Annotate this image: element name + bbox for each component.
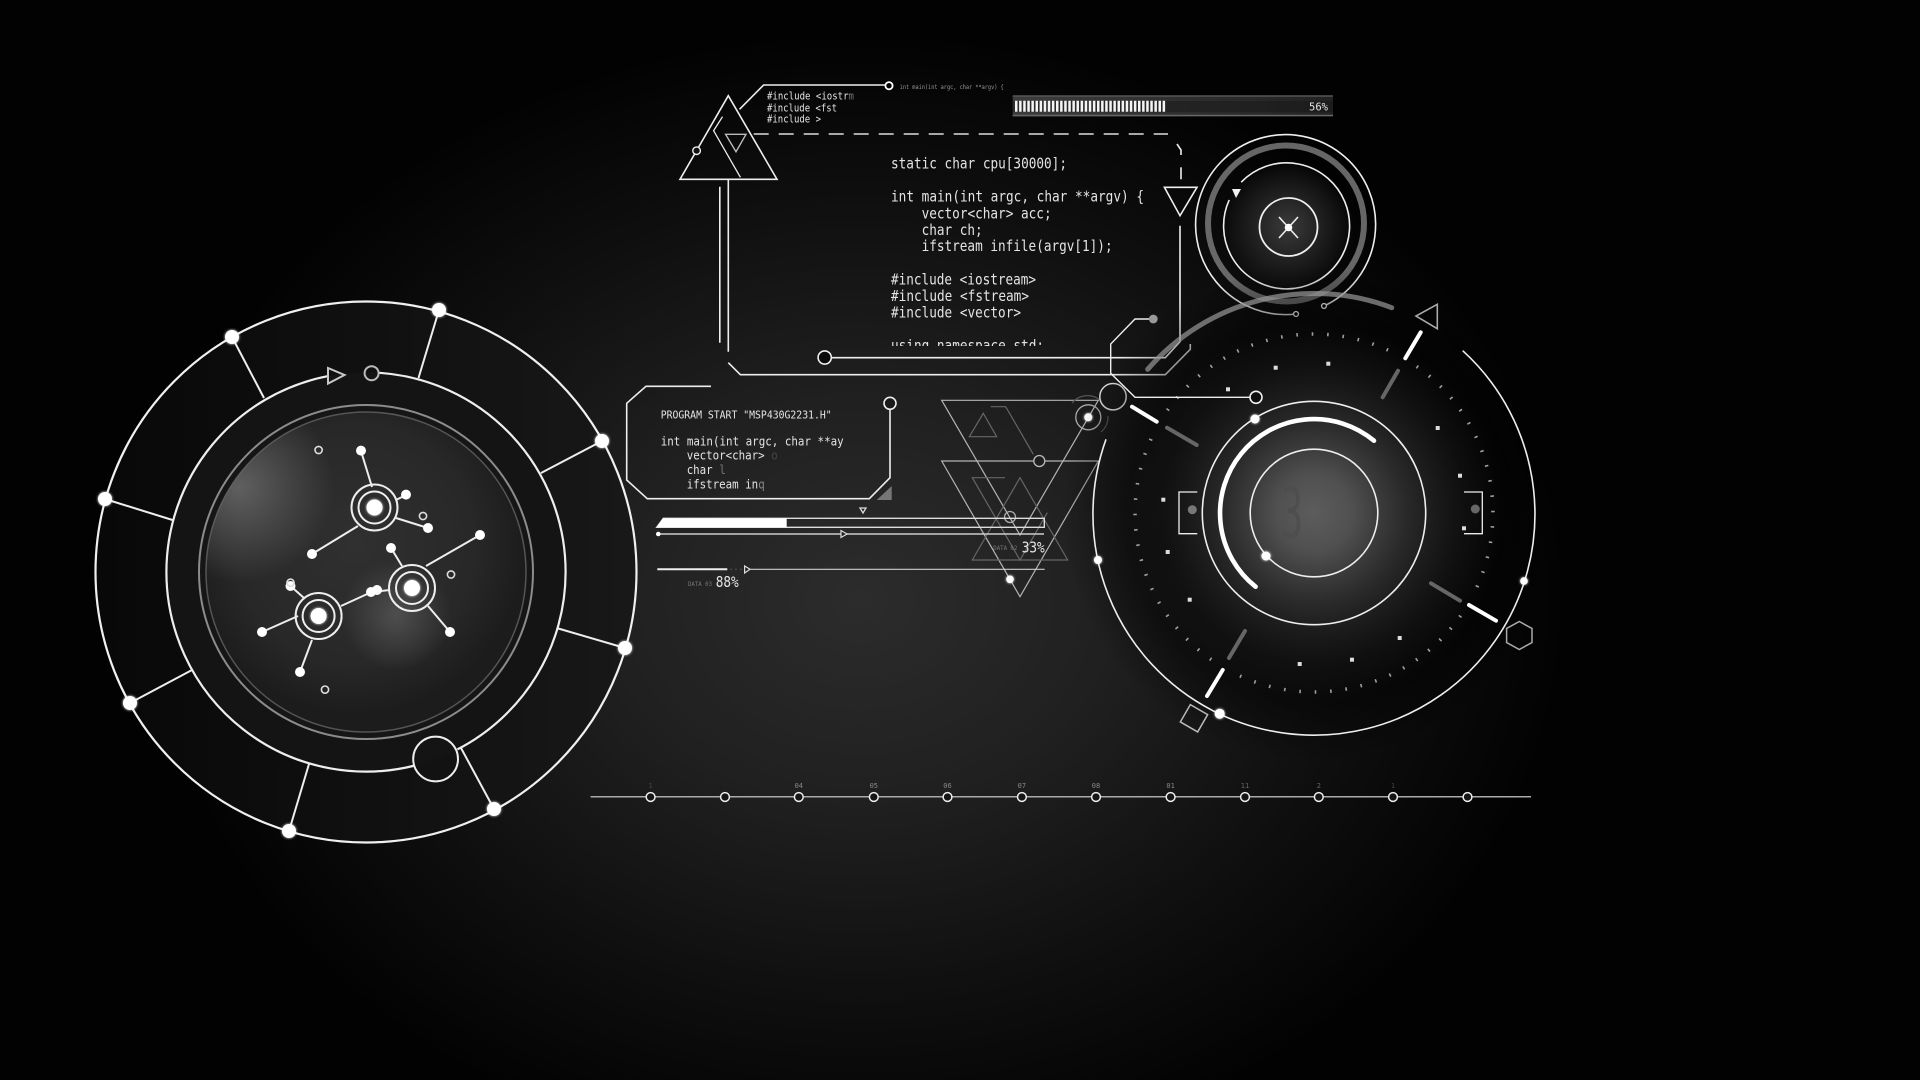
dial shading: [1064, 263, 1564, 763]
nodes: [1094, 414, 1528, 719]
code listing: #include <vector>: [891, 304, 1021, 322]
grey dashes: [1167, 371, 1460, 658]
panel: top right radar: [1196, 135, 1376, 316]
timeline labels: 06: [943, 782, 952, 790]
timeline labels: 08: [1092, 782, 1100, 790]
code listing: [891, 154, 1144, 354]
outer arc: [1093, 351, 1535, 735]
white dashes: [1132, 332, 1496, 696]
code listing: ifstream infile(argv[1]);: [922, 237, 1113, 255]
code listing: #include <iostream>: [891, 270, 1036, 288]
icon: triangle: [1416, 304, 1437, 329]
inner arc: [1224, 163, 1350, 289]
spoke nodes: [98, 303, 632, 838]
hub A: [352, 484, 398, 530]
timeline labels: 2: [1317, 782, 1321, 790]
target node: [1072, 396, 1108, 432]
spokes: [105, 310, 625, 831]
panel outline: [627, 386, 890, 499]
small rings: [287, 446, 455, 693]
timeline labels: 1: [1391, 782, 1395, 790]
grey thick ring: [1208, 146, 1364, 302]
thick progress arc: [1220, 419, 1374, 587]
timeline labels: [648, 782, 1395, 790]
code listing: static char cpu[30000];: [891, 154, 1067, 172]
code listing: int main(int argc, char **argv) {: [891, 188, 1144, 206]
label 88%: DATA 03: [688, 581, 712, 588]
program text: char l: [687, 463, 726, 477]
program text: ifstream inq: [687, 478, 765, 492]
panel: program start: [627, 386, 896, 500]
connector end dot: [1149, 315, 1158, 323]
dashed top edge: [754, 133, 1168, 135]
icon: triangle emblem: [680, 96, 777, 179]
panel: right dial: [1064, 263, 1564, 763]
icon: big circle: [413, 737, 458, 781]
icon: diamond: [1180, 705, 1208, 732]
label 88%: [688, 573, 739, 591]
icon: marker triangle: [860, 508, 866, 513]
small code caption: int main(int argc, char **argv) {: [900, 83, 1004, 91]
marker rings: [1034, 456, 1045, 466]
label 33%: 33%: [1022, 538, 1045, 556]
hub B: [389, 565, 435, 611]
connector end ring: [1250, 391, 1262, 403]
square markers: [1161, 362, 1466, 666]
program text: PROGRAM START "MSP430G2231.H": [661, 409, 832, 422]
panel: left molecule dial: [96, 302, 636, 842]
include lines: #include <iostrm: [767, 90, 854, 102]
bar line 3: [657, 566, 1045, 573]
code listing: #include <fstream>: [891, 287, 1029, 305]
molecule network: [257, 446, 485, 693]
frame lines: [720, 144, 1190, 375]
timeline labels: 01: [1166, 782, 1175, 790]
timeline markers: [646, 793, 1472, 801]
program text: vector<char> o: [687, 449, 778, 463]
middle ring: [166, 372, 566, 772]
connector line: [1111, 319, 1250, 397]
handle: [884, 397, 896, 409]
icon: inverted triangle: [1164, 187, 1197, 216]
top connector: [740, 82, 893, 109]
corner mark: [877, 486, 892, 500]
program text: int main(int argc, char **ay: [661, 434, 844, 448]
label 88%: 88%: [716, 573, 739, 591]
timeline labels: 11: [1241, 782, 1249, 790]
timeline labels: 04: [795, 782, 803, 790]
progress bar 56%: [1013, 96, 1333, 116]
outer arc: [1196, 135, 1376, 315]
bar line 2: [656, 530, 1044, 538]
panel: triangles: [942, 384, 1126, 597]
progress bar 56%: 56%: [1309, 100, 1328, 114]
timeline: [591, 782, 1531, 801]
junction ring: [1100, 384, 1126, 410]
faint numeral: 3: [1281, 473, 1303, 555]
inner ring: [1250, 449, 1378, 577]
tick ring: [1135, 334, 1493, 692]
icon: arrow: [1232, 189, 1241, 198]
icon: ring start: [365, 366, 379, 380]
big grey arc: [1148, 293, 1392, 369]
include lines: [767, 90, 854, 126]
brackets: [1179, 492, 1482, 534]
label 33%: [993, 538, 1045, 556]
icon: arrow: [328, 368, 344, 384]
timeline labels: 07: [1018, 782, 1026, 790]
icon: hexagon: [1507, 622, 1532, 650]
outer ring: [96, 302, 636, 842]
label 33%: DATA 02: [993, 545, 1018, 552]
hub C: [296, 593, 342, 639]
panel: code frame: [680, 82, 1333, 375]
include lines: #include >: [767, 112, 821, 126]
molecule nodes: [257, 446, 485, 677]
code listing: char ch;: [922, 221, 983, 239]
code listing: using namespace std;: [891, 336, 1044, 354]
include lines: #include <fst: [767, 102, 837, 114]
bar 1: [657, 518, 1044, 527]
center ring: [1260, 198, 1318, 256]
icon: cross: [1279, 217, 1298, 238]
timeline labels: 1: [648, 782, 653, 790]
code listing: vector<char> acc;: [922, 204, 1052, 222]
glass disc: [198, 404, 534, 740]
program text: [661, 409, 844, 492]
timeline labels: 05: [870, 782, 878, 790]
panel: progress bars: [656, 508, 1045, 591]
middle ring: [1202, 401, 1426, 625]
